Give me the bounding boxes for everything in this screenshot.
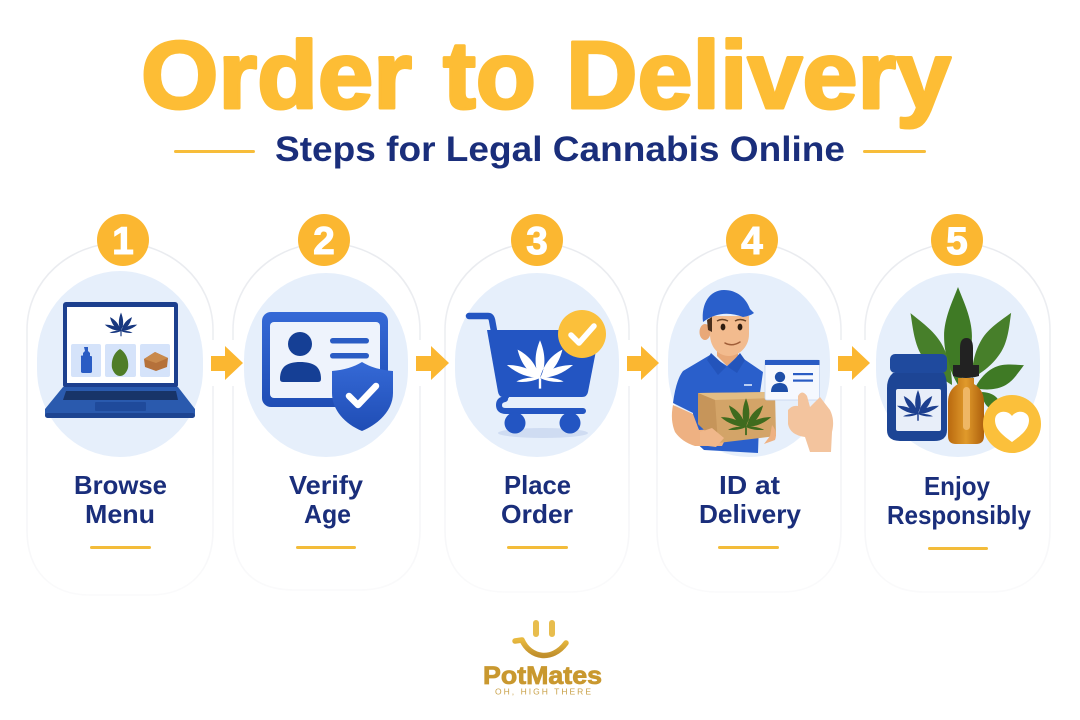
backdrop oval 1: [37, 271, 203, 457]
underline 4: [718, 546, 779, 549]
number badge 4: [726, 214, 778, 266]
underline 5: [928, 547, 988, 550]
icon: jar, dropper bottle, leaf and heart: [887, 287, 1041, 453]
step label 4: [699, 470, 802, 529]
step label 5: [887, 471, 1032, 530]
underline 1: [90, 546, 151, 549]
number badge 2: [298, 214, 350, 266]
panel: step 4 ID at delivery: [657, 214, 841, 592]
step label 4: ID at: [719, 470, 780, 500]
number badge 3: 3: [526, 220, 548, 263]
icon: courier handing box and checking ID: [672, 290, 833, 453]
backdrop oval 5: [876, 273, 1040, 457]
brand name: PotMates: [483, 662, 602, 690]
card outline 2: [233, 243, 420, 590]
step label 5: Enjoy: [924, 471, 990, 501]
step label 2: Verify: [289, 470, 364, 500]
step label 4: Delivery: [699, 499, 802, 529]
number badge 5: [931, 214, 983, 266]
backdrop oval 2: [244, 273, 408, 457]
step label 5: Responsibly: [887, 500, 1032, 530]
card outline 1: [27, 243, 213, 595]
step label 2: Age: [304, 499, 351, 529]
step label 2: [289, 470, 364, 529]
icon: smiley: [515, 620, 566, 655]
tagline: OH, HIGH THERE: [495, 686, 591, 696]
step label 1: Browse: [74, 470, 167, 500]
underline 2: [296, 546, 356, 549]
step label 1: Menu: [85, 499, 155, 529]
card outline 4: [657, 243, 841, 592]
panel: step 1 browse menu: [27, 214, 213, 595]
icon: laptop with product menu: [45, 302, 195, 418]
panel: step 5 enjoy responsibly: [865, 214, 1050, 592]
number badge 4: 4: [741, 220, 763, 263]
number badge 1: 1: [112, 220, 134, 263]
title: Delivery: [566, 22, 951, 129]
number badge 2: 2: [313, 220, 335, 263]
step label 3: Place: [504, 470, 571, 500]
arrow 4 to 5: [836, 340, 870, 386]
underline 3: [507, 546, 568, 549]
icon: ID card with shield: [262, 312, 393, 431]
number badge 3: [511, 214, 563, 266]
logo: PotMates: [483, 620, 602, 696]
number badge 5: 5: [946, 220, 968, 263]
arrow 1 to 2: [209, 340, 243, 386]
backdrop oval 4: [668, 273, 830, 457]
backdrop oval 3: [455, 273, 619, 457]
step label 1: [74, 470, 167, 529]
title: Order: [141, 22, 412, 129]
step label 3: Order: [501, 499, 573, 529]
panel: step 3 place order: [445, 214, 629, 592]
arrow 2 to 3: [414, 340, 449, 386]
title: to: [443, 22, 536, 129]
step label 3: [501, 470, 573, 529]
title: [141, 22, 951, 129]
card outline 3: [445, 243, 629, 592]
arrow 3 to 4: [625, 340, 659, 386]
card outline 5: [865, 243, 1050, 592]
panel: step 2 verify age: [233, 214, 420, 590]
subtitle with side rules: Steps for Legal Cannabis Online: [275, 129, 845, 169]
number badge 1: [97, 214, 149, 266]
icon: shopping cart with check: [469, 310, 606, 438]
